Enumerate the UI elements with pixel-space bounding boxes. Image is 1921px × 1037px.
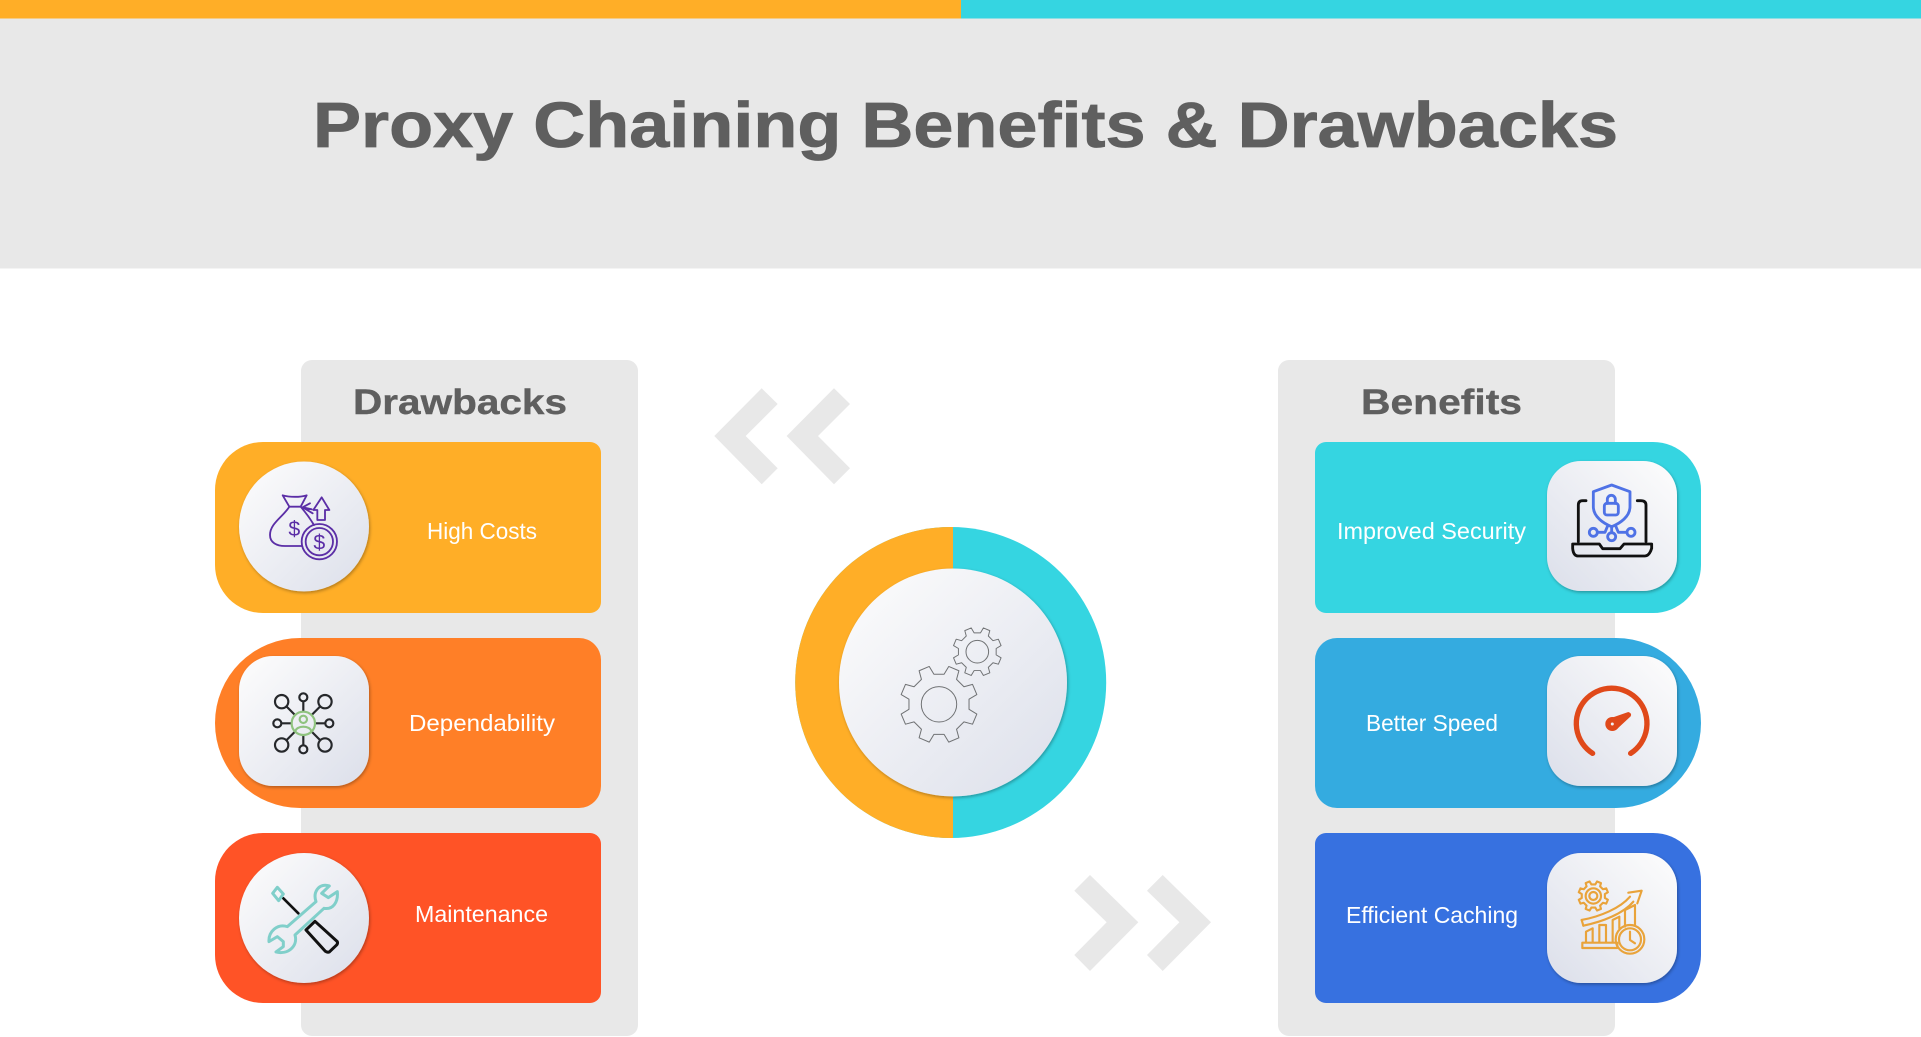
label: high costs: High Costs <box>427 518 537 544</box>
card: better speed <box>1315 638 1701 808</box>
icon: gears <box>901 628 1001 742</box>
title: Proxy Chaining Benefits & Drawbacks <box>313 89 1618 161</box>
icon: network <box>239 656 369 786</box>
label: improved security: Improved Security <box>1337 518 1526 544</box>
benefits background <box>1278 360 1615 1036</box>
card: improved security <box>1315 442 1701 613</box>
header band <box>0 18 1921 268</box>
drawbacks heading: Drawbacks <box>353 383 567 422</box>
icon: money bag <box>239 462 369 592</box>
card: maintenance <box>215 833 601 1003</box>
top colour bar <box>0 0 1921 18</box>
label: better speed: Better Speed <box>1366 710 1498 736</box>
icon: wrench and screwdriver <box>239 853 369 983</box>
panel: benefits <box>1278 360 1701 1036</box>
icon: money bag: $ <box>288 517 300 541</box>
icon: speedometer <box>1547 656 1677 786</box>
card: efficient caching <box>1315 833 1701 1003</box>
label: maintenance: Maintenance <box>415 901 548 927</box>
card: high costs <box>215 442 601 613</box>
card: dependability <box>215 638 601 808</box>
label: efficient caching: Efficient Caching <box>1346 902 1518 928</box>
drawbacks background <box>301 360 638 1036</box>
arrows: right chevrons <box>1074 875 1211 971</box>
centre disc with gears <box>839 568 1067 796</box>
centre ring <box>795 527 1106 838</box>
benefits heading: Benefits <box>1361 383 1522 422</box>
arrows: left chevrons <box>714 388 850 484</box>
label: dependability: Dependability <box>409 710 555 736</box>
panel: drawbacks <box>215 360 638 1036</box>
icon: laptop shield <box>1547 461 1677 591</box>
icon: gear chart clock <box>1547 853 1677 983</box>
icon: money bag: $ <box>313 530 325 554</box>
